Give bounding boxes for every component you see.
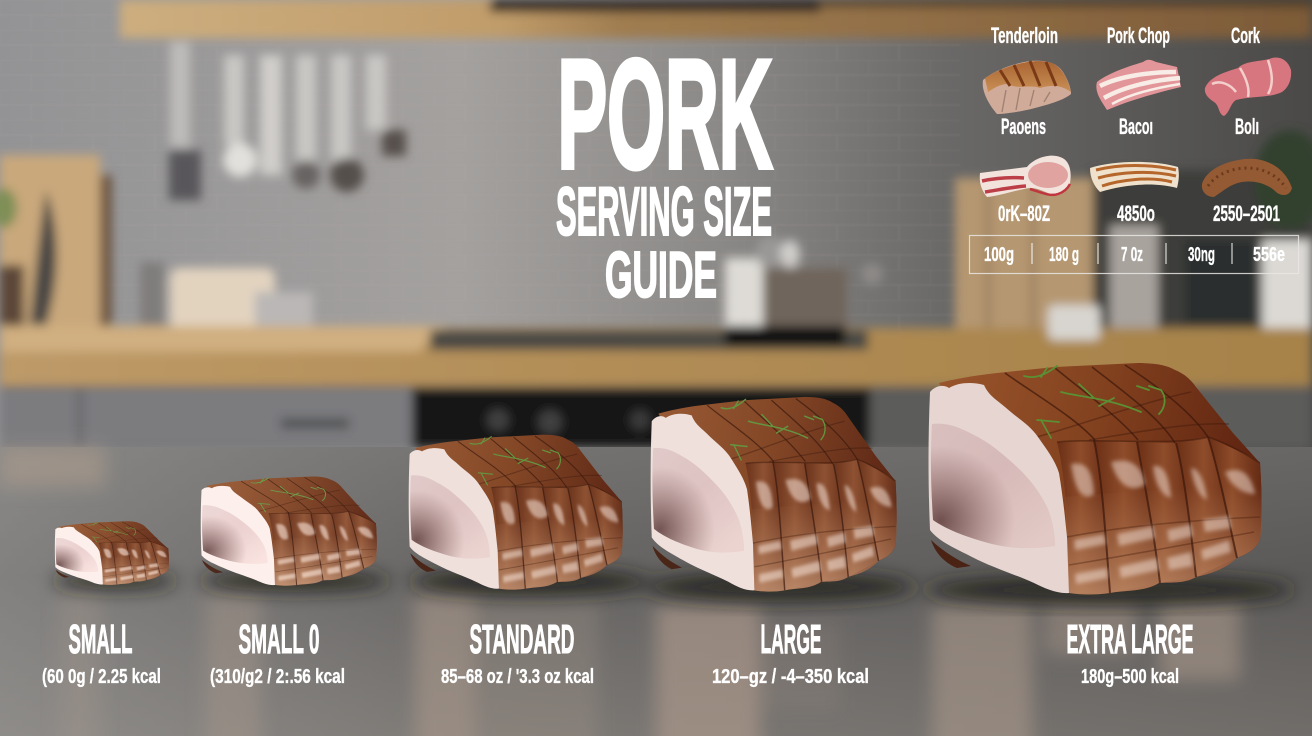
cut names row 1: Pork Chop xyxy=(1107,23,1170,48)
title: GUIDE xyxy=(605,238,717,311)
cut names row 1 xyxy=(991,23,1260,48)
size label: small 0 xyxy=(210,616,345,688)
size label: extra large xyxy=(1066,616,1194,688)
weights row xyxy=(998,201,1280,226)
cut names row 2: Paoens xyxy=(1001,114,1046,139)
size label: standard xyxy=(441,616,594,688)
icon: tenderloin xyxy=(983,61,1071,114)
roast: standard xyxy=(409,435,623,590)
infographic: pork serving size guide: PORK xyxy=(558,28,772,200)
size label: large: 120–gz / -4–350 kcal xyxy=(712,666,869,688)
blurred kitchen background xyxy=(0,0,1312,450)
size label: small xyxy=(42,616,161,688)
size label: small: SMALL xyxy=(68,616,132,662)
size label: small: (60 0g / 2.25 kcal xyxy=(42,666,161,688)
size label: standard: STANDARD xyxy=(470,616,574,662)
icon: pork chop xyxy=(980,156,1071,197)
weights strip: 7 0z xyxy=(1121,244,1143,266)
cut names row 1: Tenderloin xyxy=(991,23,1058,48)
size label: large xyxy=(712,616,869,688)
contact shadows under roasts xyxy=(53,568,1295,605)
weights strip: 100g xyxy=(984,244,1014,266)
cut names row 2: Bacoı xyxy=(1119,114,1153,139)
weights row: 0rK–80Z xyxy=(998,201,1050,226)
cut names row 1: Cork xyxy=(1231,23,1260,48)
size label: standard: 85–68 oz / '3.3 oz kcal xyxy=(441,666,594,688)
size label: extra large: 180g–500 kcal xyxy=(1081,666,1179,688)
icon: pork belly xyxy=(1096,60,1181,110)
size label: small 0: SMALL 0 xyxy=(238,616,320,662)
weights strip: 556e xyxy=(1253,244,1285,266)
panel: pork cuts xyxy=(970,23,1298,274)
title xyxy=(556,28,772,311)
cut names row 2 xyxy=(1001,114,1259,139)
size label: small 0: (310/g2 / 2:.56 kcal xyxy=(210,666,345,688)
roast: extra large xyxy=(928,363,1262,594)
roast: small 0 xyxy=(201,476,377,586)
countertop with reflections xyxy=(0,447,1312,736)
infographic: pork serving size guide: SERVING SIZE xyxy=(556,173,772,250)
roast: small xyxy=(55,521,169,585)
roast: large xyxy=(651,397,897,592)
icon: pork shoulder xyxy=(1205,58,1291,116)
weights strip xyxy=(970,236,1298,274)
icon: sausage xyxy=(1202,159,1292,197)
size label: large: LARGE xyxy=(760,616,822,662)
weights row: 4850o xyxy=(1117,201,1155,226)
weights strip: 180 g xyxy=(1049,244,1079,266)
cut names row 2: Bolı xyxy=(1235,114,1259,139)
icon: bacon strip xyxy=(1090,162,1179,192)
weights strip: 30ng xyxy=(1188,244,1215,266)
